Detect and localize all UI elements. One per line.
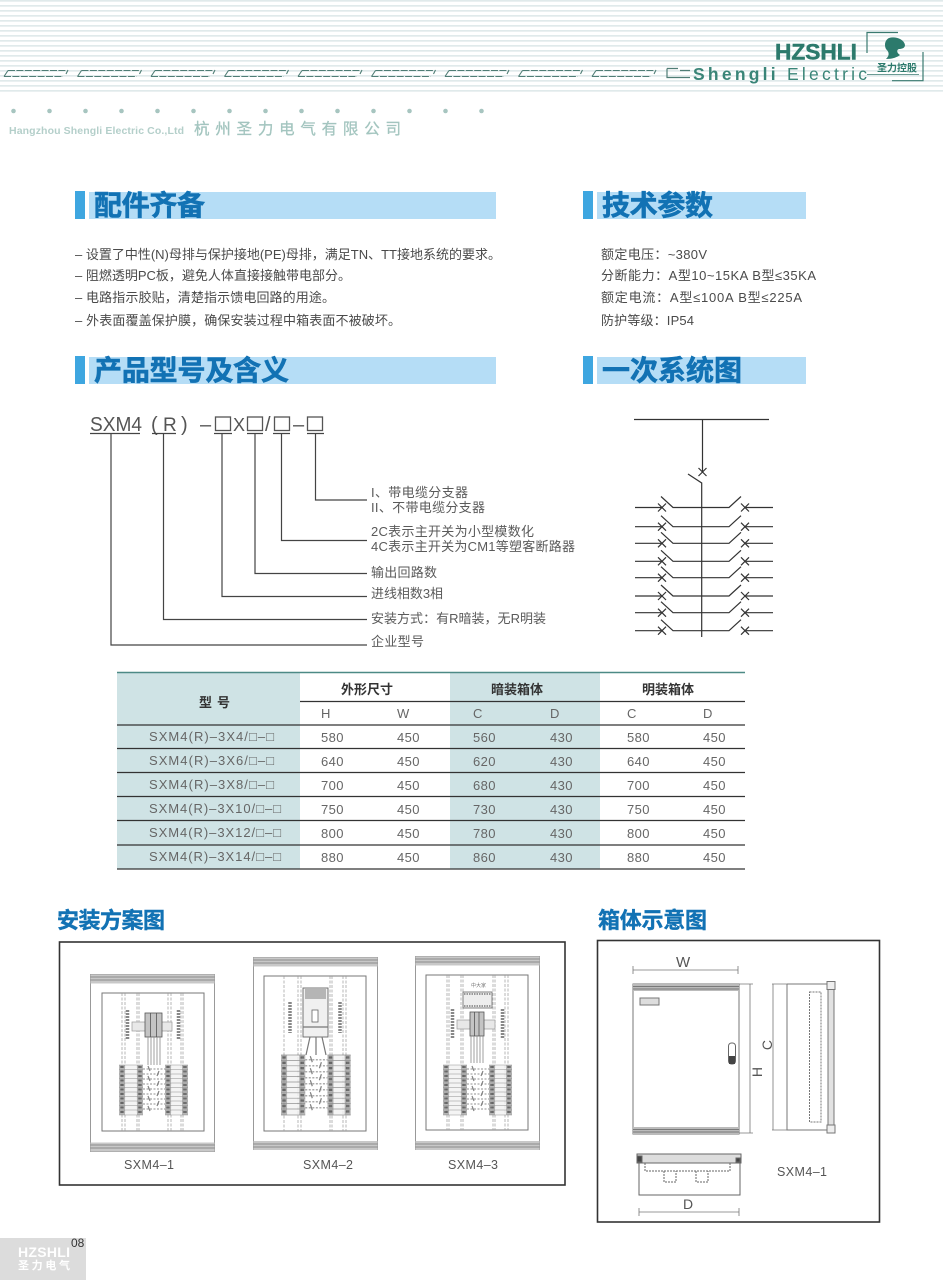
table header: C [473,706,483,721]
table header: 明装箱体 [642,682,694,697]
dimension D [639,1196,739,1216]
text block: technical parameters: 额定电压：~380V [601,247,707,262]
table row 3 [149,777,726,793]
dimension C: C [759,1040,775,1050]
brand name Shengli Electric: Shengli Electric [693,64,867,84]
model code: ( [151,414,158,436]
text block: technical parameters [601,247,816,328]
table shading [117,672,600,869]
text block: accessories list: – 外表面覆盖保护膜，确保安装过程中箱表面不被破坏。 [75,313,401,328]
company name Chinese: 杭州圣力电气有限公司 [194,120,401,138]
leader lines [90,434,367,645]
label: SXM4-1 enclosure: SXM4–1 [777,1165,827,1179]
table row 5: SXM4(R)–3X12/□–□ [149,825,281,840]
table rules [117,672,745,869]
label: SXM4-3: SXM4–3 [448,1158,498,1172]
table row 3: 450 [397,778,420,793]
table row 1: 560 [473,730,496,745]
label: SXM4-2: SXM4–2 [303,1158,353,1172]
table row 1: SXM4(R)–3X4/□–□ [149,729,274,744]
table row 3: 700 [321,778,344,793]
table header: D [703,706,713,721]
diagram: SXM4-1 [90,974,214,1152]
enclosure front view [633,984,739,1134]
text block: technical parameters: 额定电流：A型≤100A B型≤225A [601,290,802,305]
leader labels: 2C表示主开关为小型模数化 [371,524,534,539]
header band [0,0,943,95]
model code diagram [90,414,575,649]
leader labels: 安装方式：有R暗装，无R明装 [371,611,546,626]
table row 6: 880 [627,850,650,865]
table row 2: 450 [703,754,726,769]
heading: model meaning [75,355,496,386]
table row 3: 680 [473,778,496,793]
diagram: SXM4-2 [254,958,378,1150]
heading: accessories [75,190,496,221]
table row 6: 880 [321,850,344,865]
table row 1: 580 [627,730,650,745]
text block: accessories list: – 阻燃透明PC板，避免人体直接接触带电部分。 [75,268,351,283]
label: SXM4-1: SXM4–1 [124,1158,174,1172]
table row 1 [149,729,726,745]
model code: / [265,414,271,436]
table header: 暗装箱体 [491,682,543,697]
table header: D [550,706,560,721]
model code: – [293,414,305,436]
dimension table [117,672,745,869]
table row 6: 860 [473,850,496,865]
footer badge [0,1238,86,1280]
model code: SXM4 [90,414,142,436]
heading: installation schemes: 安装方案图 [57,908,165,933]
dashed header ornaments [4,68,690,78]
heading: primary system diagram [583,355,806,386]
dot row [11,109,484,113]
table row 3: 450 [703,778,726,793]
heading: enclosure diagram: 箱体示意图 [598,908,707,933]
text block: accessories list: – 电路指示胶贴，清楚指示馈电回路的用途。 [75,290,335,305]
dimension H: H [749,1067,765,1077]
text block: accessories list [75,247,501,328]
dimension W [633,954,738,974]
table row 6: 450 [397,850,420,865]
table header: C [627,706,637,721]
table row 6: SXM4(R)–3X14/□–□ [149,849,281,864]
table row 4: 750 [321,802,344,817]
diagram: SXM4-3: 中大家 [471,982,486,989]
table row 5: 450 [397,826,420,841]
table row 5 [149,825,726,841]
heading: primary system diagram: 一次系统图 [602,355,742,386]
text block: technical parameters: 防护等级：IP54 [601,313,694,328]
text block: accessories list: – 设置了中性(N)母排与保护接地(PE)母排，满足TN、TT接地系统的要求。 [75,247,501,262]
table row 5: 780 [473,826,496,841]
panel: enclosure diagram [598,940,880,1222]
table row 4 [149,801,726,817]
model code: ) [181,414,188,436]
table header: W [397,706,410,721]
table row 5: 800 [627,826,650,841]
table row 2: SXM4(R)–3X6/□–□ [149,753,274,768]
leader labels: 4C表示主开关为CM1等塑客断路器 [371,539,575,554]
leader labels: II、不带电缆分支器 [371,500,485,515]
page number: 08 [71,1236,85,1250]
table row 1: 450 [703,730,726,745]
model code: R [163,415,177,436]
brand name HZSHLI: HZSHLI [775,40,857,64]
table row 2: 430 [550,754,573,769]
table row 6 [149,849,726,865]
leader labels: 输出回路数 [371,565,437,580]
text block: technical parameters: 分断能力：A型10~15KA B型≤35KA [601,268,816,283]
table row 6: 430 [550,850,573,865]
panel: installation schemes [60,942,565,1185]
leader labels: 企业型号 [371,634,424,649]
heading: technical parameters [583,190,806,221]
model code: X [233,415,245,435]
heading: model meaning: 产品型号及含义 [94,355,289,386]
dimension D: D [683,1196,693,1212]
table row 3: 700 [627,778,650,793]
table row 1: 580 [321,730,344,745]
single-line system diagram [634,420,773,637]
table header [199,682,713,721]
logo [867,32,923,81]
table header: 外形尺寸 [341,682,393,697]
table row 1: 430 [550,730,573,745]
leader labels [371,485,575,649]
table row 4: 750 [627,802,650,817]
heading: technical parameters: 技术参数 [602,190,713,221]
heading: accessories: 配件齐备 [94,190,205,221]
company name English: Hangzhou Shengli Electric Co.,Ltd [9,125,184,137]
table row 2: 620 [473,754,496,769]
dimension W: W [676,954,691,971]
table header: H [321,706,331,721]
table row 3: SXM4(R)–3X8/□–□ [149,777,274,792]
enclosure bottom view [637,1154,741,1195]
table row 1: 450 [397,730,420,745]
logo: 圣力控股 [877,62,917,74]
table row 3: 430 [550,778,573,793]
model code: – [200,414,212,436]
table row 5: 800 [321,826,344,841]
diagram: SXM4-3 [416,956,540,1150]
table row 2: 640 [627,754,650,769]
table row 4: 450 [703,802,726,817]
table row 2: 450 [397,754,420,769]
table row 4: 730 [473,802,496,817]
model code [90,414,322,436]
table row 5: 450 [703,826,726,841]
dimension H [739,984,765,1133]
footer badge: HZSHLI [18,1244,70,1260]
table row 4: 430 [550,802,573,817]
dimension C [759,984,787,1130]
table row 4: SXM4(R)–3X10/□–□ [149,801,281,816]
table row 2 [149,753,726,769]
table row 6: 450 [703,850,726,865]
table row 4: 450 [397,802,420,817]
enclosure side view [787,982,835,1133]
table header: 型号 [199,695,230,710]
leader labels: I、带电缆分支器 [371,485,468,500]
table row 2: 640 [321,754,344,769]
table row 5: 430 [550,826,573,841]
footer badge: 圣力电气 [18,1258,70,1272]
leader labels: 进线相数3相 [371,586,443,601]
